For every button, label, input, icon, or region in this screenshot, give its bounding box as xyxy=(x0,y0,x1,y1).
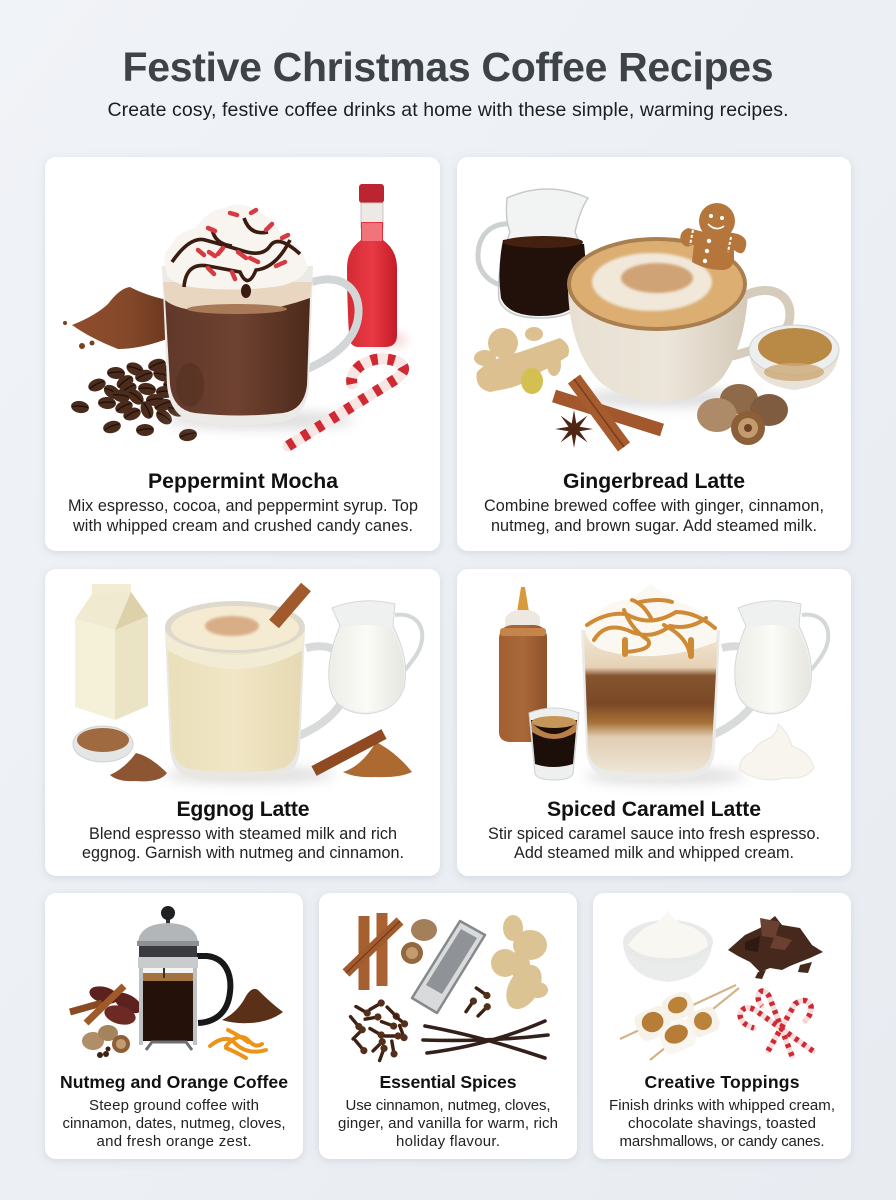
icon: milk pitcher xyxy=(735,601,828,714)
icon: bowl of whipped cream xyxy=(623,910,713,982)
icon: cocoa powder pile xyxy=(63,287,167,349)
description: Mix espresso, cocoa, and peppermint syrup. Top xyxy=(68,497,418,515)
icon: bowl of nutmeg xyxy=(73,726,133,762)
description xyxy=(82,825,404,862)
subtitle: Create cosy, festive coffee drinks at home with these simple, warming recipes. xyxy=(108,99,788,121)
icon: layered caramel latte glass xyxy=(581,630,763,784)
icon: candy cane xyxy=(288,359,404,446)
description: chocolate shavings, toasted xyxy=(628,1115,816,1132)
description: Stir spiced caramel sauce into fresh espresso. xyxy=(488,825,820,843)
icon: bowl of brown sugar xyxy=(749,325,839,390)
icon: caramel squeeze bottle xyxy=(499,587,547,742)
heading: Peppermint Mocha xyxy=(148,470,338,493)
description: Steep ground coffee with xyxy=(89,1097,259,1114)
description: Blend espresso with steamed milk and rich xyxy=(89,825,397,843)
description xyxy=(488,825,820,862)
icon: french press xyxy=(137,906,230,1050)
panel: Gingerbread Latte xyxy=(457,157,851,551)
panel: Peppermint Mocha xyxy=(45,157,440,551)
panel: Eggnog Latte xyxy=(45,569,440,876)
description xyxy=(62,1097,286,1150)
panel: Spiced Caramel Latte xyxy=(457,569,851,876)
description: with whipped cream and crushed candy canes. xyxy=(72,517,413,535)
icon: star anise xyxy=(555,410,593,448)
description: marshmallows, or candy canes. xyxy=(620,1133,824,1150)
heading: Nutmeg and Orange Coffee xyxy=(60,1072,288,1092)
description xyxy=(338,1097,558,1150)
icon: cinnamon sticks xyxy=(346,913,400,990)
panel: Nutmeg and Orange Coffee xyxy=(45,893,303,1159)
icon: grater xyxy=(412,921,485,1013)
heading: Spiced Caramel Latte xyxy=(547,798,761,821)
description: Combine brewed coffee with ginger, cinnamon, xyxy=(484,497,824,515)
icon: cinnamon stick in mug xyxy=(274,587,306,624)
description: and fresh orange zest. xyxy=(96,1133,252,1150)
heading: Gingerbread Latte xyxy=(563,470,745,493)
icon: candy canes xyxy=(740,991,813,1056)
heading: Essential Spices xyxy=(380,1072,517,1092)
icon: chocolate shavings xyxy=(728,916,823,979)
icon: espresso shot glass xyxy=(529,708,579,780)
icon: nutmegs xyxy=(401,919,437,964)
icon: milk pitcher xyxy=(329,601,422,714)
icon: cinnamon sticks and spice xyxy=(314,734,412,777)
description xyxy=(484,497,824,535)
description: Add steamed milk and whipped cream. xyxy=(514,844,794,862)
icon: eggnog mug xyxy=(165,601,350,783)
icon: cinnamon, dates and nutmeg xyxy=(70,983,145,1058)
heading: Creative Toppings xyxy=(644,1072,800,1092)
icon: coffee beans xyxy=(70,357,198,442)
icon: vanilla pods xyxy=(423,1021,548,1058)
icon: whipped cream dollop xyxy=(740,724,814,780)
panel: Creative Toppings xyxy=(593,893,851,1159)
icon: latte cup xyxy=(567,237,790,407)
icon: orange zest xyxy=(210,1030,266,1058)
icon: nutmegs xyxy=(697,384,788,445)
icon: whipped cream with caramel drizzle xyxy=(586,584,717,656)
description xyxy=(68,497,418,535)
icon: cinnamon sticks xyxy=(554,379,662,447)
icon: spice pile xyxy=(110,753,167,781)
description: nutmeg, and brown sugar. Add steamed milk. xyxy=(491,517,817,535)
icon: glass pitcher of coffee xyxy=(478,189,588,318)
description: Use cinnamon, nutmeg, cloves, xyxy=(346,1097,550,1114)
description: holiday flavour. xyxy=(396,1133,500,1150)
icon: red syrup bottle xyxy=(347,184,408,348)
icon: scattered cloves xyxy=(348,985,492,1062)
description: cinnamon, dates, nutmeg, cloves, xyxy=(62,1115,286,1132)
description: Finish drinks with whipped cream, xyxy=(609,1097,835,1114)
heading: Eggnog Latte xyxy=(176,798,310,821)
description: eggnog. Garnish with nutmeg and cinnamon. xyxy=(82,844,404,862)
icon: ginger root xyxy=(474,323,569,394)
panel: Essential Spices xyxy=(319,893,577,1159)
description xyxy=(609,1097,835,1150)
icon: gingerbread man xyxy=(680,203,746,270)
icon: milk carton xyxy=(75,584,148,720)
icon: ginger xyxy=(491,915,549,1015)
icon: toasted marshmallows xyxy=(620,985,739,1060)
icon: mug with whipped cream xyxy=(162,204,359,429)
description: ginger, and vanilla for warm, rich xyxy=(338,1115,558,1132)
icon: ground coffee pile xyxy=(222,989,283,1023)
title: Festive Christmas Coffee Recipes xyxy=(122,44,774,90)
